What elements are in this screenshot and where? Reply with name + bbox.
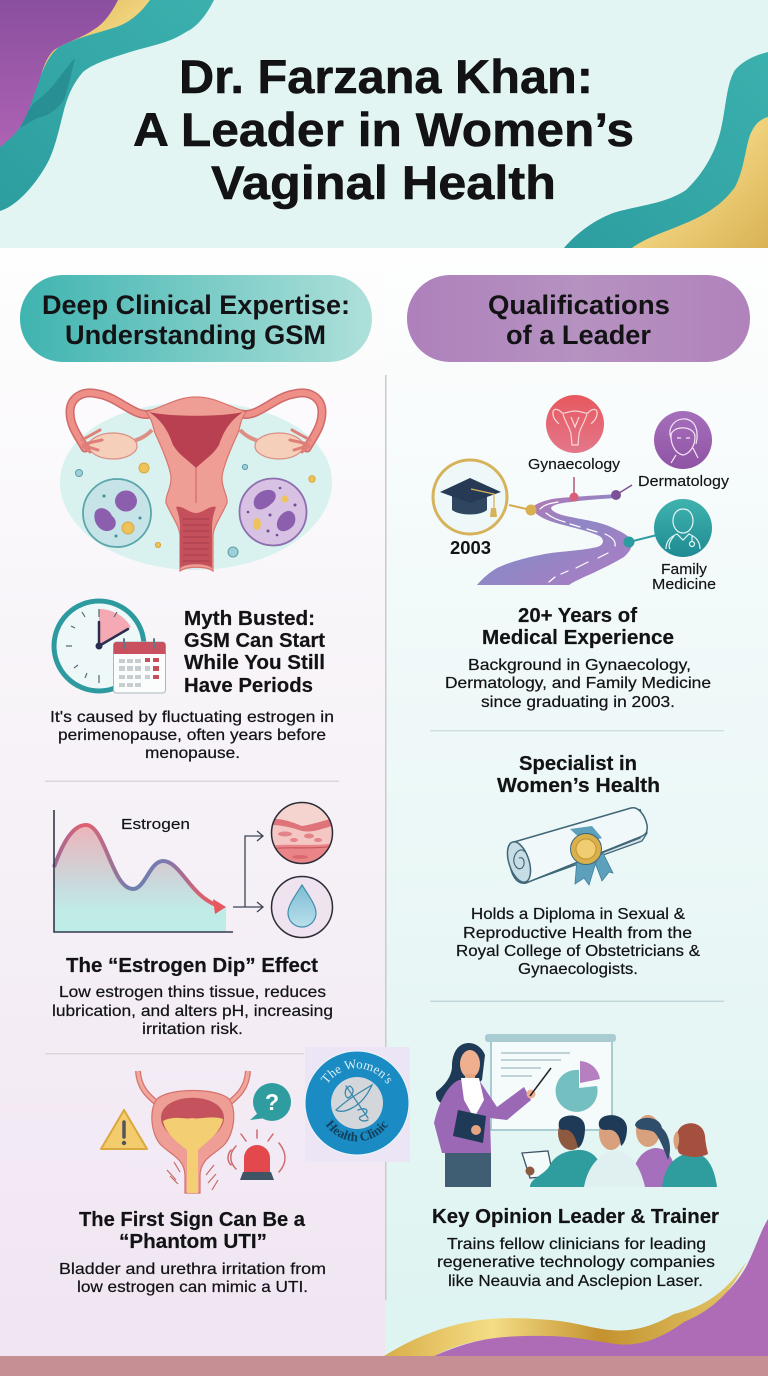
audience member: purple top — [630, 1115, 680, 1187]
text: key opinion leader body — [437, 1236, 715, 1290]
text: estrogen dip body: lubrication, and alters pH, increasing — [52, 1003, 333, 1020]
road — [477, 494, 632, 585]
icon: question bubble: ? — [265, 1089, 279, 1115]
right column heading pill — [407, 275, 750, 362]
left column heading pill — [20, 275, 372, 362]
icon: dermatology badge — [654, 411, 712, 469]
text: diploma body: Royal College of Obstetricians & — [456, 943, 700, 960]
heading: phantom uti: The First Sign Can Be a — [79, 1209, 306, 1231]
logo caduceus — [336, 1085, 372, 1121]
cell: purple — [240, 478, 306, 546]
icon: diploma scroll — [503, 808, 647, 885]
heading: myth busted — [184, 608, 325, 697]
text: phantom uti body — [59, 1261, 326, 1296]
label: 2003: 2003 — [450, 538, 491, 558]
text: key opinion leader body: regenerative technology companies — [437, 1254, 715, 1271]
icon: warning triangle — [101, 1110, 147, 1149]
decorative wave: bottom — [384, 1219, 768, 1356]
title: Dr. Farzana Khan: — [179, 50, 593, 103]
right tube and ovary — [240, 393, 322, 459]
illustration: uterus and cells — [60, 393, 332, 571]
text: myth busted body: perimenopause, often years before — [58, 727, 326, 744]
illustration: presenter and audience — [434, 1034, 717, 1187]
icon: graduation cap — [433, 460, 507, 534]
left tube and ovary — [70, 393, 152, 459]
floating particles — [76, 463, 315, 557]
icon: water drop — [272, 876, 332, 938]
text: key opinion leader body: Trains fellow clinicians for leading — [447, 1236, 706, 1253]
uterus body — [146, 397, 246, 571]
heading: experience: Medical Experience — [482, 627, 674, 649]
label: gynaecology: Gynaecology — [528, 456, 621, 473]
branch: dermatology node — [611, 485, 632, 500]
icon: question bubble — [250, 1083, 291, 1121]
left column heading pill: Deep Clinical Expertise: — [42, 290, 350, 320]
footer bar — [0, 1356, 768, 1376]
text: myth busted body: menopause. — [145, 745, 240, 762]
text: phantom uti body: Bladder and urethra irritation from — [59, 1261, 326, 1278]
text: key opinion leader body: like Neauvia and Asclepion Laser. — [448, 1273, 703, 1290]
cell: teal — [83, 479, 151, 547]
text: myth busted body: It's caused by fluctuating estrogen in — [50, 709, 334, 726]
label: family medicine: Family — [661, 561, 708, 578]
left column heading pill: Understanding GSM — [65, 320, 326, 350]
text: experience body: Dermatology, and Family Medicine — [445, 675, 711, 692]
text: diploma body — [456, 906, 700, 978]
text: experience body: since graduating in 2003. — [481, 694, 675, 711]
heading: specialist: Women’s Health — [497, 775, 660, 797]
arrows: estrogen effects — [233, 831, 263, 912]
text: experience body: Background in Gynaecology, — [468, 657, 691, 674]
heading: phantom uti: “Phantom UTI” — [119, 1231, 267, 1253]
chart: estrogen curve — [54, 810, 233, 932]
heading: myth busted: Myth Busted: — [184, 608, 315, 630]
heading: experience — [482, 605, 674, 649]
text: diploma body: Reproductive Health from the — [463, 925, 692, 942]
logo: the women's health clinic — [304, 1047, 410, 1162]
text: estrogen dip body — [52, 984, 333, 1038]
logo: the women's health clinic: The Women's — [320, 1060, 392, 1084]
icon: gynaecology badge — [546, 395, 604, 453]
title: Vaginal Health — [211, 156, 556, 209]
heading: experience: 20+ Years of — [518, 605, 637, 627]
icon: alarm siren — [228, 1130, 285, 1180]
presenter — [434, 1043, 551, 1187]
header banner — [0, 0, 768, 248]
label: dermatology: Dermatology — [638, 473, 730, 490]
heading: myth busted: GSM Can Start — [184, 630, 325, 652]
heading: estrogen dip: The “Estrogen Dip” Effect — [66, 955, 318, 977]
heading: specialist: Specialist in — [519, 753, 637, 775]
timeline: career road — [477, 477, 657, 585]
decorative wave: bottom right — [564, 52, 768, 248]
text: estrogen dip body: Low estrogen thins tissue, reduces — [59, 984, 326, 1001]
label: family medicine — [652, 561, 716, 593]
icon: family medicine badge — [654, 499, 712, 557]
title — [133, 50, 634, 209]
heading: specialist — [497, 753, 660, 797]
logo: the women's health clinic: Health Clinic — [326, 1119, 388, 1142]
label: family medicine: Medicine — [652, 576, 716, 593]
heading: myth busted: While You Still — [184, 652, 325, 674]
branch: 2003 node — [509, 504, 536, 516]
audience member: auburn hair — [662, 1123, 717, 1187]
audience member: white shirt — [584, 1115, 645, 1187]
decorative wave: top left — [0, 0, 214, 211]
text: experience body — [445, 657, 711, 711]
illustration: bladder — [138, 1071, 248, 1193]
presentation board — [485, 1034, 616, 1130]
heading: myth busted: Have Periods — [184, 675, 313, 697]
audience member: tablet — [522, 1116, 598, 1187]
branch: family medicine node — [624, 535, 657, 548]
right column heading pill: Qualifications — [488, 290, 670, 320]
text: diploma body: Gynaecologists. — [518, 961, 638, 978]
chart label: Estrogen — [121, 816, 190, 833]
heading: key opinion leader: Key Opinion Leader & Trainer — [432, 1206, 719, 1228]
text: myth busted body — [50, 709, 334, 762]
title: A Leader in Women’s — [133, 103, 634, 156]
right column heading pill: of a Leader — [506, 320, 651, 350]
text: diploma body: Holds a Diploma in Sexual & — [471, 906, 685, 923]
icon: thinned tissue — [270, 802, 335, 866]
icon: clock and calendar — [54, 601, 166, 693]
text: estrogen dip body: irritation risk. — [142, 1021, 243, 1038]
branch: gynaecology node — [570, 477, 578, 502]
heading: phantom uti — [79, 1209, 306, 1253]
text: phantom uti body: low estrogen can mimic a UTI. — [77, 1279, 308, 1296]
